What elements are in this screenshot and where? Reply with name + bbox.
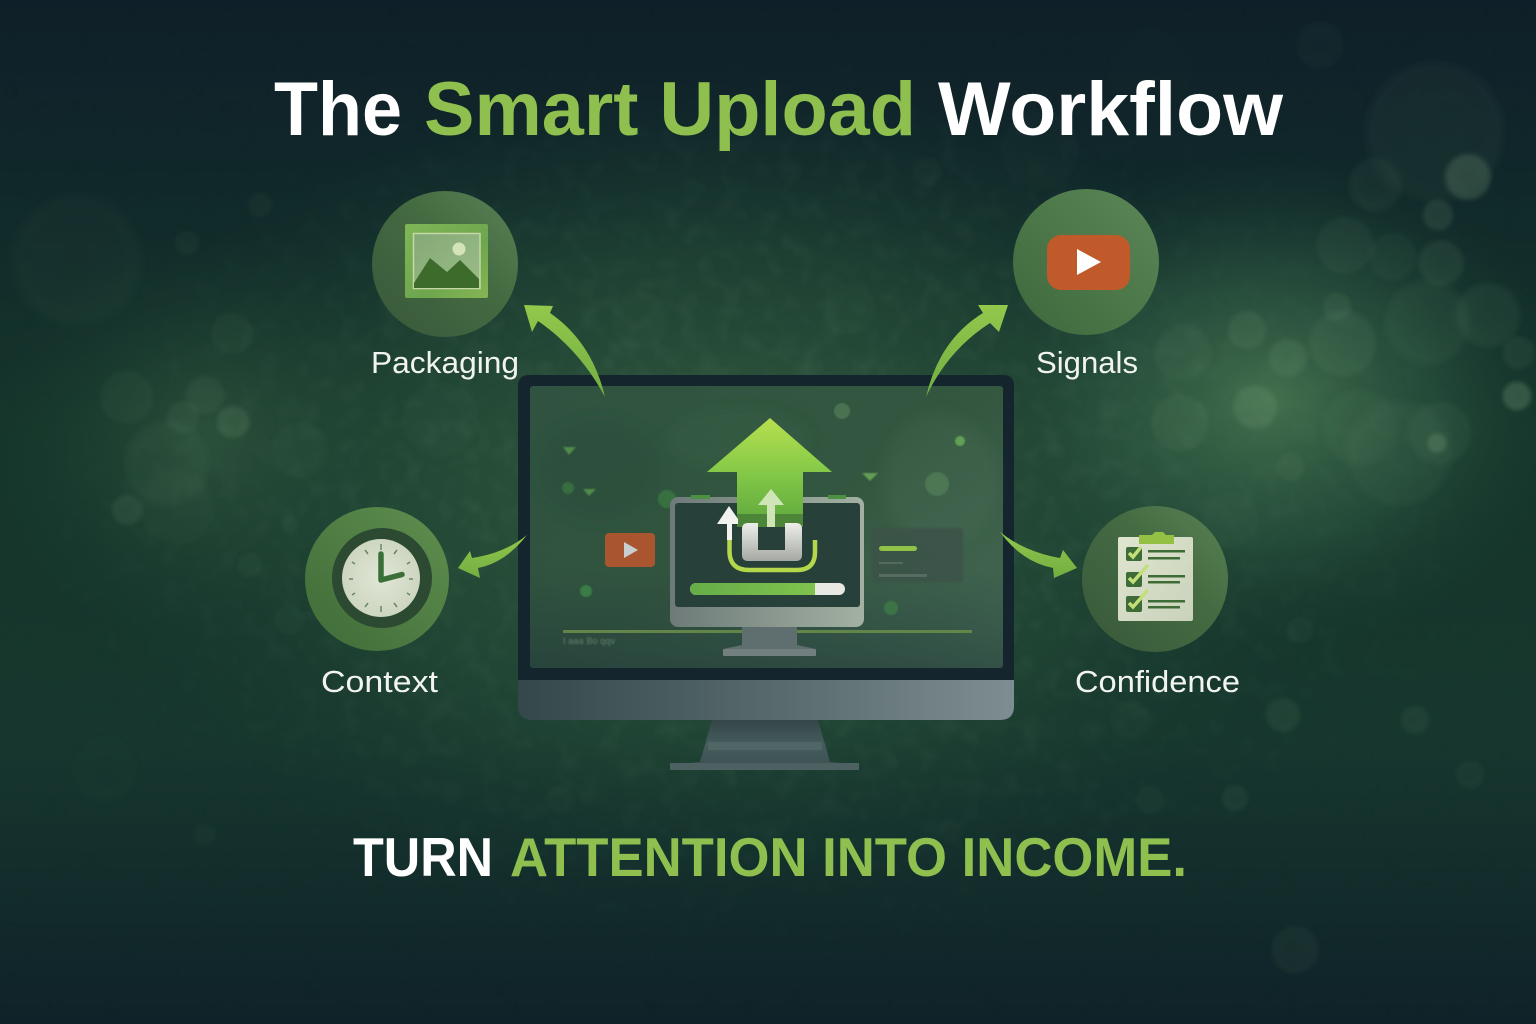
side card (872, 528, 963, 582)
label: packaging: Packaging (371, 345, 519, 380)
label: confidence: Confidence (1075, 664, 1240, 699)
context disc (305, 507, 449, 651)
title (274, 67, 1284, 152)
icon: picture (405, 224, 488, 298)
red play tile (605, 533, 655, 567)
arrow: to confidence (1000, 532, 1077, 578)
tagline: TURN (353, 826, 493, 888)
monitor chin (518, 679, 1014, 720)
node: signals (1013, 189, 1159, 380)
title: Workflow (938, 67, 1284, 152)
node: context (305, 507, 449, 699)
icon: play button (1047, 235, 1130, 290)
node: confidence (1075, 506, 1240, 699)
label: signals: Signals (1036, 345, 1138, 380)
signals disc (1013, 189, 1159, 335)
title: The (274, 67, 402, 152)
upload tray (742, 523, 802, 561)
arrow: to context (458, 535, 527, 578)
confidence disc (1082, 506, 1228, 652)
inner monitor screen (675, 503, 860, 607)
small light arrow (758, 489, 784, 527)
tagline: ATTENTION INTO INCOME. (510, 826, 1187, 888)
inner monitor body (670, 497, 864, 627)
inner monitor (670, 418, 864, 656)
monitor (518, 375, 1014, 770)
monitor bezel (518, 375, 1014, 680)
progress bar (690, 583, 845, 595)
arrow: to packaging (524, 305, 605, 397)
screen baseline and caption: I aaa Bo qqv (563, 636, 616, 646)
screen baseline and caption (563, 630, 972, 646)
inner stand (723, 627, 816, 656)
node: packaging (371, 191, 519, 380)
monitor stand (670, 720, 859, 770)
icon: clock (332, 528, 432, 628)
arrow: to signals (926, 305, 1008, 397)
large upload arrow (707, 418, 832, 527)
icon: clipboard checklist (1118, 532, 1193, 621)
title: Smart Upload (424, 67, 916, 152)
monitor screen (530, 386, 1003, 668)
white curved return arrow (717, 506, 815, 570)
label: context: Context (321, 664, 438, 699)
packaging disc (372, 191, 518, 337)
